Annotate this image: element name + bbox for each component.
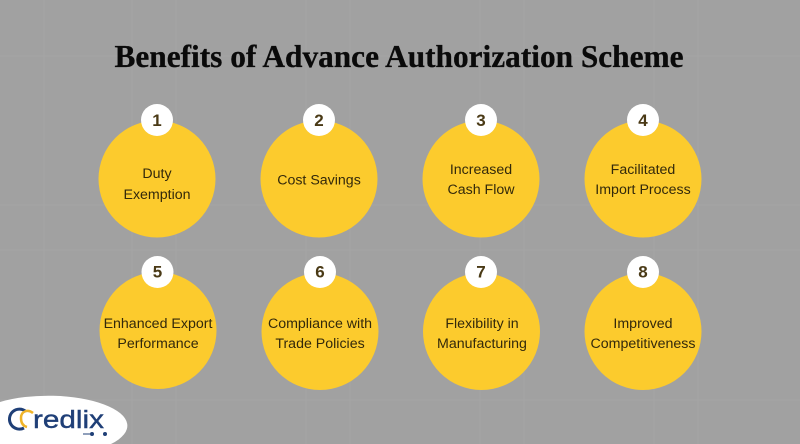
benefit 4: facilitated import process [584,104,702,238]
benefit 6: compliance with trade policies [262,256,378,390]
benefit 8: improved competitiveness [584,256,702,390]
benefit 1: duty exemption: 1 [152,111,162,130]
benefit 2: cost savings [260,104,378,238]
benefit 8: improved competitiveness: 8 [638,262,648,282]
benefit 5: enhanced export performance [100,256,216,389]
benefit 3: increased cash flow: Increased [450,162,512,178]
benefit 4: facilitated import process: Import Process [595,182,691,198]
benefit 7: flexibility in manufacturing: 7 [476,262,486,282]
title: Benefits of Advance Authorization Scheme [114,38,684,74]
benefit 2: cost savings: Cost Savings [277,172,361,188]
benefit 3: increased cash flow [422,104,540,238]
benefit 8: improved competitiveness: Competitiveness [591,336,695,352]
benefit 1: duty exemption: Duty [142,166,172,182]
benefit 7: flexibility in manufacturing: Flexibility in [445,316,519,332]
benefit 6: compliance with trade policies: Compliance with [268,316,372,332]
benefit 5: enhanced export performance: Enhanced Export [104,316,212,332]
benefit 8: improved competitiveness: Improved [613,316,673,332]
benefit 2: cost savings: 2 [314,111,324,130]
benefit 1: duty exemption [98,104,216,238]
benefit 1: duty exemption: Exemption [123,187,191,203]
benefit 5: enhanced export performance: Performance [117,336,199,352]
benefit 3: increased cash flow: 3 [476,111,486,130]
logo: credlix: redlix [33,406,105,434]
benefit 6: compliance with trade policies: 6 [315,262,325,282]
logo: credlix [0,396,127,444]
benefit 6: compliance with trade policies: Trade Policies [275,336,365,352]
benefit 4: facilitated import process: Facilitated [611,162,675,178]
benefit 3: increased cash flow: Cash Flow [447,182,515,198]
benefit 7: flexibility in manufacturing: Manufacturing [437,336,527,352]
benefit 7: flexibility in manufacturing [423,256,540,390]
benefit 5: enhanced export performance: 5 [153,262,162,282]
benefit 4: facilitated import process: 4 [638,111,648,130]
